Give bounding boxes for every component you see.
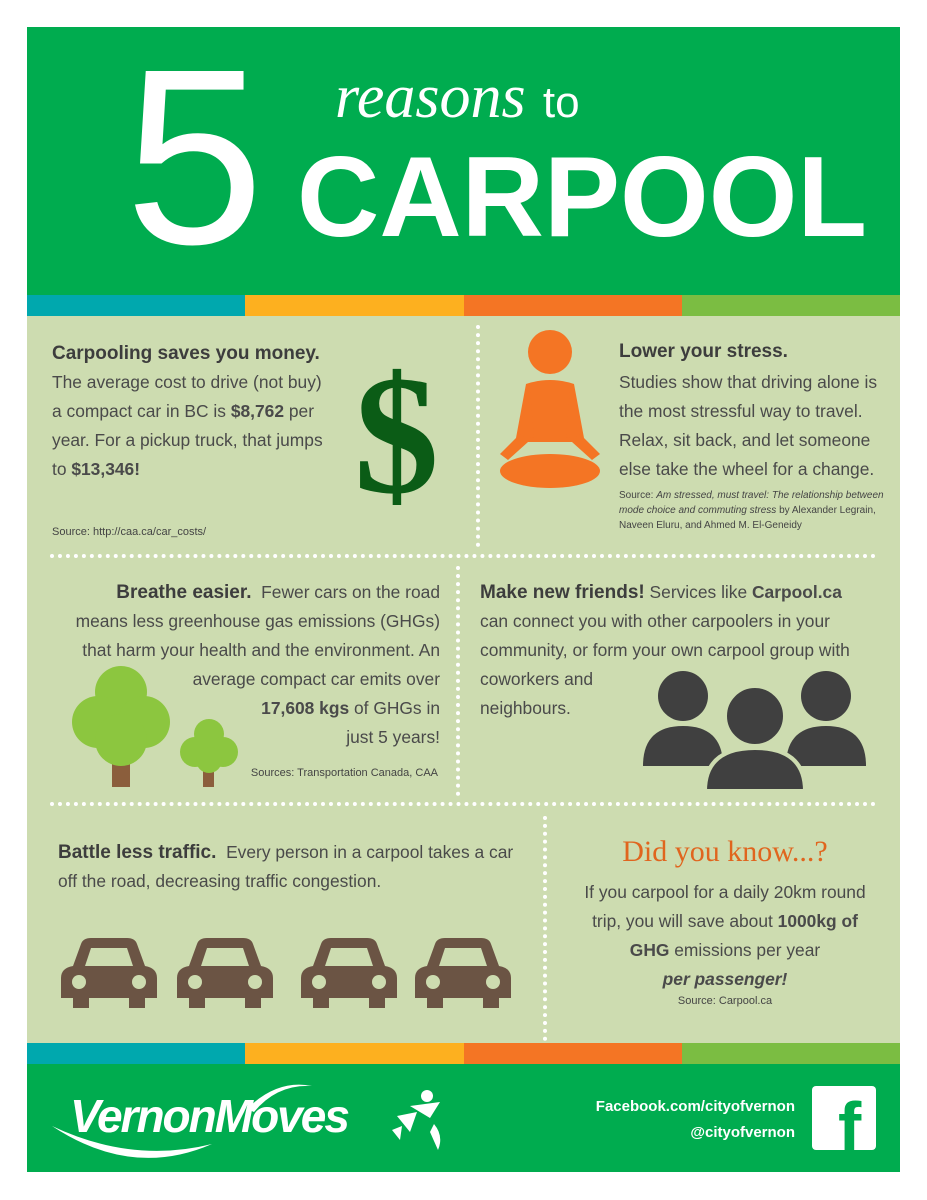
text traffic [58,842,513,891]
footer [27,1064,900,1172]
text friends: Make new friends! Services like Carpool.ca [480,582,842,603]
text breathe: Breathe easier. Fewer cars on the road [116,582,440,603]
reasons to: reasons to [335,63,580,131]
text stress: else take the wheel for a change. [619,459,874,479]
heading stress: Lower your stress. [619,341,788,362]
text breathe: 17,608 kgs of GHGs in [261,698,440,718]
icon: dollar: $ [354,341,439,529]
text money: The average cost to drive (not buy) [52,372,322,392]
panel: breathe [72,582,440,787]
text did you know [584,882,866,989]
icon: meditation [500,330,600,488]
text did you know: GHG emissions per year [630,940,820,960]
text stress: Relax, sit back, and let someone [619,430,870,450]
color strip top [27,295,900,316]
CARPOOL: CARPOOL [297,134,867,261]
text breathe [76,582,440,747]
panel: did you know [584,835,866,1007]
text money [52,372,323,479]
panel: money [52,341,439,538]
source breathe: Sources: Transportation Canada, CAA [251,767,438,779]
text breathe: average compact car emits over [193,669,440,689]
source did you know: Source: Carpool.ca [678,995,772,1007]
social text [596,1098,795,1141]
text friends: coworkers and [480,669,593,689]
text did you know: per passenger! [663,969,787,989]
text breathe: means less greenhouse gas emissions (GHGs) [76,611,440,631]
text did you know: trip, you will save about 1000kg of [592,911,858,931]
icon: cars [61,938,511,1008]
text breathe: that harm your health and the environment. An [82,640,440,660]
panel: stress [500,330,884,531]
text did you know: If you carpool for a daily 20km round [584,882,866,902]
heading did you know: Did you know...? [622,835,828,868]
text traffic: off the road, decreasing traffic congestion. [58,871,381,891]
social text: @cityofvernon [690,1124,795,1141]
text money: year. For a pickup truck, that jumps [52,430,323,450]
text stress [619,372,877,479]
source stress: Source: Am stressed, must travel: The relationship between mode choice and commuting stress by Alexander Legrain, Naveen Eluru, and Ahmed M. El-Geneidy [619,490,884,531]
source money: Source: http://caa.ca/car_costs/ [52,526,206,538]
text stress: Studies show that driving alone is [619,372,877,392]
body background [27,316,900,1043]
text money: a compact car in BC is $8,762 per [52,401,314,421]
text friends: community, or form your own carpool group with [480,640,850,660]
social text: Facebook.com/cityofvernon [596,1098,795,1115]
color strip bottom [27,1043,900,1064]
text traffic: Battle less traffic. Every person in a carpool takes a car [58,842,513,863]
panel: friends [480,582,866,789]
icon: people [643,671,866,789]
text stress: the most stressful way to travel. [619,401,863,421]
text breathe: just 5 years! [346,727,440,747]
icon: trees [72,666,238,787]
text friends: neighbours. [480,698,571,718]
text money: to $13,346! [52,459,140,479]
icon: facebook [812,1086,876,1150]
logo VernonMoves: VernonMoves [70,1090,348,1142]
big number 5: 5 [125,17,264,296]
text friends: can connect you with other carpoolers in your [480,611,830,631]
header panel [27,27,900,295]
text friends [480,582,850,718]
heading money: Carpooling saves you money. [52,343,320,364]
panel: traffic [58,842,513,1008]
logo VernonMoves [52,1084,440,1158]
